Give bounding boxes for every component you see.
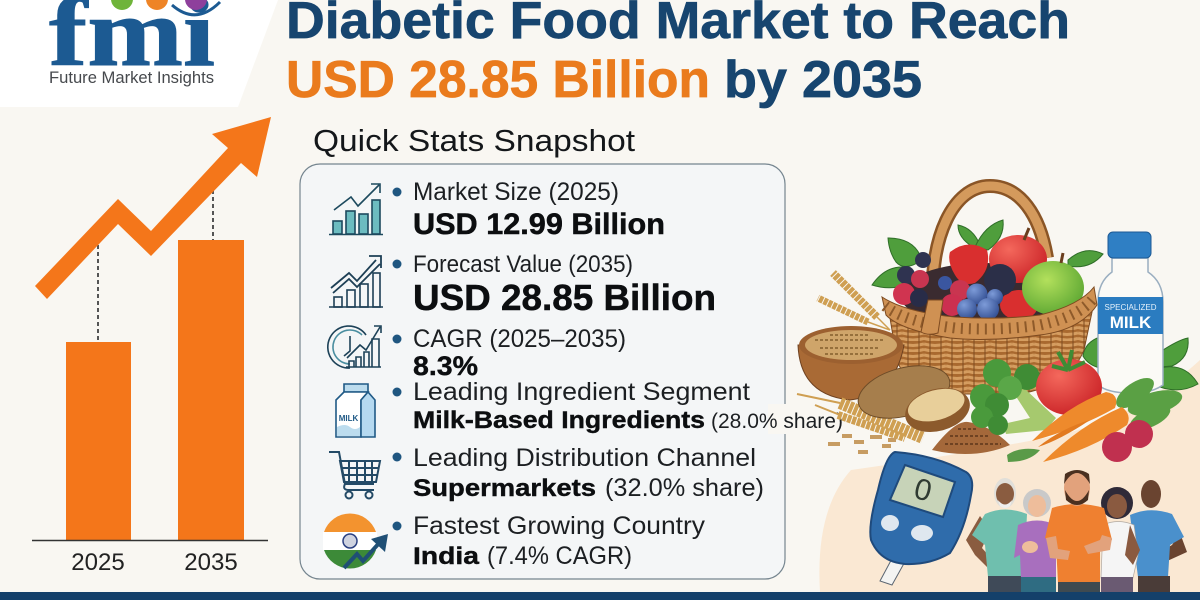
stat: fastest growing country: India: [413, 543, 480, 570]
icon: clock with chart: [328, 326, 381, 368]
icon: bar chart with arrow: [329, 184, 383, 234]
icon: line chart with arrow: [329, 256, 383, 307]
fruit leaves: [872, 220, 1103, 288]
basket body: [890, 312, 1092, 394]
bottom banner strip: [0, 592, 1200, 600]
bar: 2025: [66, 342, 131, 540]
berries: [893, 252, 1016, 320]
stat: leading distribution channel: (32.0% share): [605, 474, 764, 502]
illustration: broccoli: [970, 359, 1056, 435]
carrots: [1032, 392, 1129, 462]
illustration: bowl of grain: [798, 326, 904, 400]
stat: forecast value: USD 28.85 Billion: [413, 277, 716, 318]
illustration: lentils and seeds: [828, 422, 1040, 462]
icon: shopping cart: [329, 452, 380, 498]
icon: milk carton: MILK: [339, 414, 358, 423]
stat: fastest growing country: [392, 512, 706, 570]
stat: leading ingredient segment: (28.0% share): [711, 410, 843, 433]
illustration: glucose meter: 0: [911, 472, 935, 509]
beige backdrop blob: [819, 360, 1200, 592]
stat: CAGR: 8.3%: [413, 351, 478, 381]
axis label: 2035: 2035: [184, 549, 238, 576]
illustration: wholegrain bread: [852, 357, 975, 439]
stat: leading ingredient segment: Leading Ingredient Segment: [413, 378, 750, 406]
illustration: specialized milk bottle: MILK: [1110, 313, 1152, 332]
stat: leading distribution channel: [392, 444, 764, 502]
illustration: wheat stalks: [797, 273, 923, 438]
stat: leading distribution channel: Leading Distribution Channel: [413, 444, 756, 472]
axis label: 2025: 2025: [71, 549, 125, 576]
carrot greens: [1111, 372, 1185, 435]
icon: milk carton: [336, 384, 375, 437]
basket rim: [882, 287, 1097, 339]
stat: forecast value: [392, 251, 716, 318]
illustration: group of people: [966, 470, 1187, 592]
stat: market size: [392, 178, 665, 241]
heading: Quick Stats Snapshot: Quick Stats Snapshot: [313, 123, 635, 158]
stat: CAGR: CAGR (2025–2035): [413, 325, 626, 353]
title: [286, 0, 1070, 109]
illustration: glucose meter: [870, 452, 972, 585]
fruit backdrop: [900, 263, 1070, 327]
illustration: carrots and radishes: [1032, 372, 1185, 462]
stat: fastest growing country: (7.4% CAGR): [487, 542, 632, 570]
bar chart: market growth 2025 to 2035: [32, 190, 268, 576]
stat: fastest growing country: Fastest Growing Country: [413, 512, 706, 540]
person: older woman in purple: [1014, 489, 1056, 592]
illustration: specialized milk bottle: SPECIALIZED: [1104, 303, 1157, 312]
stat: market size: Market Size (2025): [413, 178, 619, 206]
title: by 2035: [724, 51, 922, 109]
arrow: upward growth trend: [35, 117, 271, 299]
person: man in blue shirt: [1130, 480, 1187, 592]
radishes: [1102, 420, 1153, 462]
stat: leading ingredient segment: [392, 378, 843, 434]
green apple: [1022, 253, 1084, 315]
logo: Future Market Insights: Future Market Insights: [49, 69, 214, 87]
stat: leading ingredient segment: Milk-Based Ingredients: [413, 407, 705, 434]
stat: CAGR: [392, 325, 626, 381]
title: USD 28.85 Billion: [286, 51, 710, 109]
panel: quick stats: [300, 164, 846, 579]
person: older man in teal: [966, 478, 1027, 592]
icon: India flag with arrow: [323, 513, 388, 569]
logo: Future Market Insights: [0, 0, 278, 107]
basket handle back part: [933, 186, 1047, 300]
illustration: specialized milk bottle: [1098, 232, 1163, 393]
bar: 2035: [178, 240, 244, 540]
stat: market size: USD 12.99 Billion: [413, 208, 665, 241]
person: man in orange shirt: [1045, 470, 1112, 592]
stat: forecast value: Forecast Value (2035): [413, 251, 633, 278]
stat: leading distribution channel: Supermarkets: [413, 475, 596, 502]
red apple: [989, 228, 1047, 283]
person: woman in white tank: [1101, 487, 1140, 592]
illustration: tomato: [1036, 350, 1102, 415]
strawberries: [949, 244, 1038, 320]
illustration: leaves behind bottle: [1083, 337, 1198, 390]
illustration: basket of fruit: [872, 186, 1103, 394]
